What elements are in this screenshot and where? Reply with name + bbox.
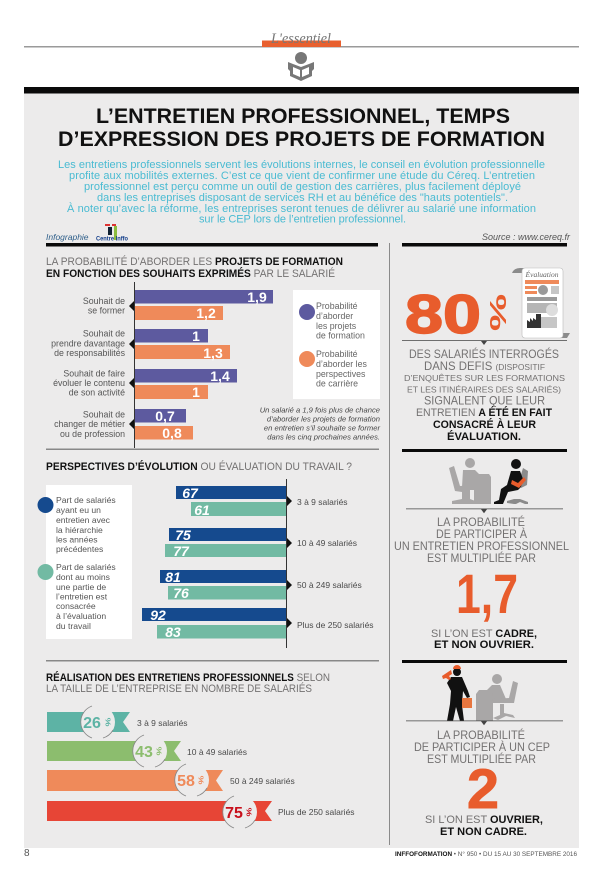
ribbon labels: 10 à 49 salariés <box>187 747 247 757</box>
text top: DE PARTICIPER À <box>436 528 527 541</box>
legend: consacrée <box>56 601 96 611</box>
divider section 2 <box>46 448 379 450</box>
title <box>58 104 545 151</box>
category labels: changer de métier <box>54 419 125 429</box>
text bottom: ET NON OUVRIER. <box>434 639 534 651</box>
big number 1,7: 1,7 <box>456 562 518 625</box>
big number 80 %: 80 <box>405 283 481 345</box>
heading: LA PROBABILITÉ D’ABORDER LES PROJETS DE FORMATION <box>46 255 343 268</box>
ribbon 58 %: 58 <box>177 773 195 790</box>
bars: 92 <box>150 607 166 623</box>
size labels: 3 à 9 salariés <box>297 497 348 507</box>
text block: ET LES ITINÉRAIRES DES SALARIÉS) <box>407 384 561 394</box>
text block: DES SALARIÉS INTERROGÉS <box>409 348 559 361</box>
icon: manager and worker seated <box>449 458 528 504</box>
divider section 3 <box>46 660 379 662</box>
icon: reader with book <box>288 52 314 81</box>
intro text: professionnel est perçu comme un outil de gestion des carrières, plus facilement déployé <box>84 181 521 193</box>
intro text: À noter qu’avec la réforme, les entreprises seront tenues de délivrer au salarié une information <box>67 202 536 215</box>
ribbon 26 %: % <box>104 718 112 727</box>
panel: grey background <box>24 94 579 848</box>
bars: 1,2 <box>196 305 216 321</box>
legend <box>293 290 380 399</box>
panel: 80 % <box>402 268 570 443</box>
axis <box>134 282 135 448</box>
category labels: Souhait de faire <box>63 368 125 378</box>
ribbon labels: 50 à 249 salariés <box>230 776 295 786</box>
infographic credit with logo: Centre Inffo <box>96 236 128 242</box>
category labels: prendre davantage <box>51 338 125 348</box>
line with pointer <box>406 508 563 513</box>
ribbon 43 %: 43 <box>135 744 153 761</box>
black rule right <box>402 243 567 246</box>
legend: Probabilité <box>316 349 358 359</box>
bars: 1 <box>192 328 200 344</box>
category labels: Souhait de <box>83 296 125 306</box>
ribbon 43 % <box>47 734 181 768</box>
intro text: dans les entreprises disposant de services RH et au bénéfice des "hauts potentiels". <box>97 192 508 204</box>
title: L’ENTRETIEN PROFESSIONNEL, TEMPS <box>96 104 510 128</box>
bars <box>142 485 286 640</box>
big number 80 %: % <box>484 294 510 331</box>
bars: 0,8 <box>162 425 182 441</box>
legend: Part de salariés <box>56 562 116 572</box>
legend: de formation <box>316 330 365 340</box>
panel: 2 <box>406 665 563 838</box>
legend: Part de salariés <box>56 495 116 505</box>
legend: perspectives <box>316 369 366 379</box>
text block: DANS DEFIS (DISPOSITIF <box>424 361 545 373</box>
page header: L'essentiel: L'essentiel <box>270 31 331 47</box>
infographic credit with logo: Infographie <box>46 232 89 242</box>
text top <box>414 729 550 766</box>
text block: ÉVALUATION. <box>447 430 521 443</box>
text top: LA PROBABILITÉ <box>437 516 525 529</box>
text bottom: SI L’ON EST CADRE, <box>431 628 537 640</box>
chart note <box>260 406 380 442</box>
big number 80 % <box>405 283 510 345</box>
text bottom <box>425 814 543 838</box>
heading: PERSPECTIVES D’ÉVOLUTION OU ÉVALUATION DU TRAVAIL ? <box>46 460 352 473</box>
icon: evaluation document <box>512 268 570 338</box>
text bottom <box>431 628 537 651</box>
page header: L'essentiel <box>24 31 579 48</box>
big number 2: 2 <box>467 757 499 820</box>
panel: perspectives d'évolution <box>38 460 374 648</box>
legend: entretien avec <box>56 515 111 525</box>
text top <box>394 516 570 565</box>
ribbon labels <box>137 718 355 817</box>
text block: ENTRETIEN A ÉTÉ EN FAIT <box>416 406 552 419</box>
ribbon labels: Plus de 250 salariés <box>278 807 355 817</box>
legend: dont au moins <box>56 572 110 582</box>
intro text: Les entretiens professionnels servent les évolutions internes, le conseil en évolution professionnelle <box>58 159 545 171</box>
category labels: ou de profession <box>60 429 125 439</box>
category labels: évoluer le contenu <box>53 378 125 388</box>
legend: de carrière <box>316 378 358 388</box>
legend: l’entretien est <box>56 592 108 602</box>
bars: 81 <box>165 569 181 585</box>
category labels: Souhait de <box>83 328 125 338</box>
text top: UN ENTRETIEN PROFESSIONNEL <box>394 541 570 553</box>
icon: evaluation document: Évaluation <box>525 269 559 279</box>
text top: DE PARTICIPER À UN CEP <box>414 741 550 754</box>
size labels: Plus de 250 salariés <box>297 620 374 630</box>
bars: 75 <box>175 527 191 543</box>
page number: 8 <box>24 848 30 859</box>
intro text <box>58 159 545 226</box>
heading: RÉALISATION DES ENTRETIENS PROFESSIONNELS SELON <box>46 671 330 684</box>
intro text: sur le CEP lors de l’entretien professionnel. <box>199 214 406 226</box>
vertical divider <box>389 243 390 845</box>
legend <box>38 485 132 639</box>
legend: d’aborder <box>316 311 353 321</box>
axis arrows <box>287 496 292 628</box>
text block: SIGNALENT QUE LEUR <box>424 396 545 408</box>
title: D’EXPRESSION DES PROJETS DE FORMATION <box>58 127 545 151</box>
axis <box>286 479 287 648</box>
legend: une partie de <box>56 582 106 592</box>
bars: 67 <box>182 485 199 501</box>
bars: 76 <box>173 585 189 601</box>
size labels: 10 à 49 salariés <box>297 538 357 548</box>
panel: probability chart <box>46 255 380 448</box>
text top: EST MULTIPLIÉE PAR <box>427 753 536 766</box>
footer: INFFOFORMATION • N° 950 • DU 15 AU 30 SEPTEMBRE 2016 <box>395 850 577 858</box>
legend: à l’évaluation <box>56 611 106 621</box>
ribbon labels: 3 à 9 salariés <box>137 718 188 728</box>
bars: 83 <box>165 624 181 640</box>
legend: Probabilité <box>316 301 358 311</box>
heading <box>46 671 330 695</box>
infographic credit with logo <box>46 224 128 242</box>
ribbon 26 % <box>47 705 130 739</box>
legend: ayant eu un <box>56 505 101 515</box>
panel: réalisation des entretiens <box>46 671 355 829</box>
bars: 1,9 <box>247 289 267 305</box>
bars: 1,3 <box>203 345 223 361</box>
category labels: se former <box>88 306 125 316</box>
axis arrows <box>129 301 134 429</box>
black rule 2 <box>402 449 567 452</box>
bars: 77 <box>173 543 190 559</box>
ribbon 75 %: 75 <box>225 805 243 822</box>
top black bar <box>24 87 579 94</box>
text bottom: ET NON CADRE. <box>440 826 527 838</box>
black rule 3 <box>402 660 567 663</box>
intro text: profite aux mobilités externes. C’est ce que vient de confirmer une étude du Céreq. L’entretien <box>69 170 535 182</box>
text top: LA PROBABILITÉ <box>437 729 525 742</box>
size labels: 50 à 249 salariés <box>297 580 362 590</box>
legend: d’aborder les <box>316 359 367 369</box>
legend: la hiérarchie <box>56 525 103 535</box>
ribbon 43 %: % <box>155 747 163 756</box>
ribbon 58 %: % <box>197 776 205 785</box>
legend: du travail <box>56 621 91 631</box>
text bottom: SI L’ON EST OUVRIER, <box>425 814 543 826</box>
heading: LA TAILLE DE L’ENTREPRISE EN NOMBRE DE SALARIÉS <box>46 682 312 695</box>
text block: D’ENQUÊTES SUR LES FORMATIONS <box>404 373 565 383</box>
bars: 0,7 <box>155 408 175 424</box>
heading <box>46 255 343 280</box>
black rule left <box>46 243 378 246</box>
legend: les projets <box>316 321 357 331</box>
ribbon 58 % <box>47 763 223 797</box>
ribbon 75 % <box>47 795 272 829</box>
category labels: Souhait de <box>83 410 125 420</box>
category labels <box>51 296 126 439</box>
ribbon 75 %: % <box>245 808 253 817</box>
line with pointer <box>402 340 567 345</box>
category labels: de son activité <box>69 388 125 398</box>
icon: worker and manager <box>442 665 518 721</box>
text block: CONSACRÉ À LEUR <box>433 418 536 431</box>
text block <box>404 348 565 443</box>
ribbon 26 %: 26 <box>83 715 101 732</box>
legend: les années <box>56 534 98 544</box>
panel: 1,7 <box>394 458 570 651</box>
chart note: d’aborder les projets de formation <box>267 414 380 424</box>
size labels <box>297 497 374 630</box>
line with pointer <box>406 720 563 725</box>
bars <box>135 289 273 441</box>
source: Source : www.cereq.fr <box>482 232 571 242</box>
bars: 1,4 <box>210 368 230 384</box>
heading: EN FONCTION DES SOUHAITS EXPRIMÉS PAR LE SALARIÉ <box>46 267 335 280</box>
text top: EST MULTIPLIÉE PAR <box>427 552 536 565</box>
chart note: en entretien s’il souhaite se former <box>264 424 380 432</box>
bars: 1 <box>192 384 200 400</box>
category labels: de responsabilités <box>54 348 126 358</box>
legend: précédentes <box>56 544 103 554</box>
bars: 61 <box>194 502 210 518</box>
chart note: dans les cinq prochaines années. <box>267 432 380 442</box>
chart note: Un salarié a 1,9 fois plus de chance <box>260 406 380 414</box>
